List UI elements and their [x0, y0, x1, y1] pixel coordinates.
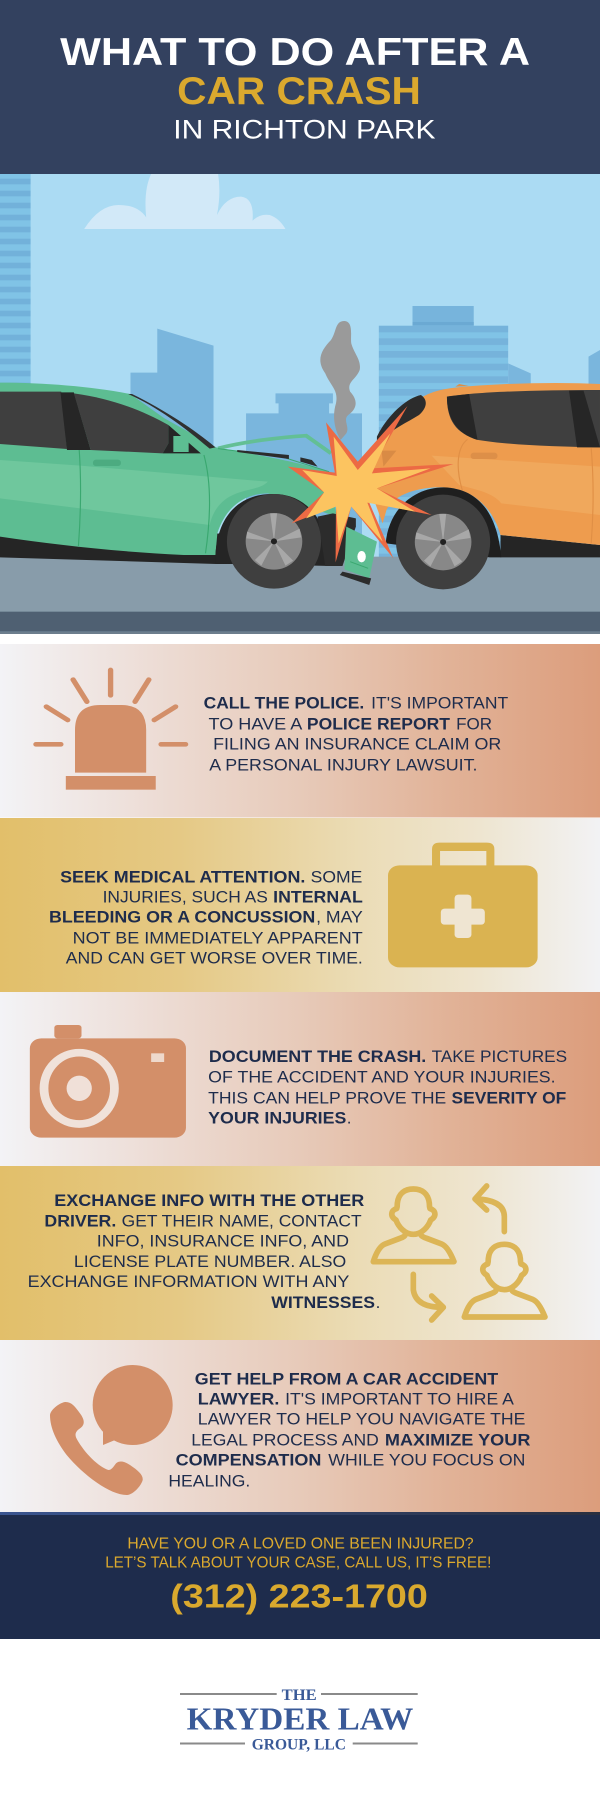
text: exchange info: GET THEIR NAME, CONTACT: [122, 1211, 362, 1230]
text: call the police: POLICE REPORT: [307, 714, 451, 733]
subtitle: IN RICHTON PARK: [173, 115, 436, 145]
text: document the crash: TAKE PICTURES: [432, 1047, 567, 1066]
text: get help: MAXIMIZE YOUR: [385, 1430, 530, 1449]
text: exchange info: EXCHANGE INFORMATION WITH ANY: [28, 1272, 349, 1291]
phone number: (312) 223-1700: [170, 1577, 428, 1614]
text: get help: HEALING.: [168, 1471, 250, 1490]
text: get help: [168, 1369, 530, 1490]
green car wheel: [227, 494, 321, 589]
text: get help: IT'S IMPORTANT TO HIRE A: [285, 1389, 515, 1408]
logo: the kryder law group: THE: [282, 1687, 317, 1704]
text: seek medical attention: INJURIES, SUCH AS: [103, 887, 268, 906]
call to action text: [105, 1535, 491, 1571]
text: get help: LEGAL PROCESS AND: [191, 1430, 379, 1449]
text: call the police: FILING AN INSURANCE CLAIM OR: [213, 734, 501, 753]
left tower: [0, 174, 31, 387]
text: seek medical attention: SOME: [311, 867, 362, 886]
text: document the crash: SEVERITY OF: [452, 1088, 566, 1107]
orange car: [362, 383, 600, 557]
smoke: [320, 321, 360, 440]
text: exchange info: LICENSE PLATE NUMBER. ALSO: [74, 1252, 346, 1271]
text: seek medical attention: NOT BE IMMEDIATELY APPARENT: [73, 928, 363, 947]
icon: first aid kit: [388, 843, 538, 967]
green car: [0, 383, 377, 585]
text: get help: WHILE YOU FOCUS ON: [328, 1450, 525, 1469]
panel: get help from a lawyer: [0, 1340, 600, 1512]
skyline: [130, 306, 600, 559]
text: call the police: FOR: [456, 714, 492, 733]
text: seek medical attention: SEEK MEDICAL ATTENTION.: [60, 867, 305, 886]
icon: siren: [36, 670, 186, 790]
title line: car crash: CAR CRASH: [177, 70, 421, 113]
text: exchange info: EXCHANGE INFO WITH THE OTHER: [54, 1191, 364, 1210]
title line: what to do after a: WHAT TO DO AFTER A: [60, 31, 530, 74]
call to action text: LET’S TALK ABOUT YOUR CASE, CALL US, IT’S FREE!: [105, 1554, 491, 1571]
text: call the police: A PERSONAL INJURY LAWSUIT.: [209, 755, 478, 774]
icon: phone with speech bubble: [50, 1365, 173, 1495]
text: get help: LAWYER.: [198, 1389, 279, 1408]
crash illustration: [0, 174, 600, 634]
panel: seek medical attention: [0, 818, 600, 992]
explosion: [288, 406, 453, 562]
text: get help: COMPENSATION: [176, 1450, 321, 1469]
text: document the crash: [208, 1047, 567, 1127]
text: seek medical attention: , MAY: [316, 908, 363, 927]
text: call the police: IT'S IMPORTANT: [371, 693, 508, 712]
cloud: [84, 174, 285, 229]
icon: camera: [30, 1025, 186, 1138]
call to action text: HAVE YOU OR A LOVED ONE BEEN INJURED?: [127, 1535, 474, 1552]
road: [0, 557, 600, 634]
text: exchange info: INFO, INSURANCE INFO, AND: [97, 1231, 349, 1250]
text: exchange info: [28, 1191, 380, 1312]
text: call the police: TO HAVE A: [208, 714, 303, 733]
text: exchange info: .: [376, 1293, 380, 1312]
logo: the kryder law group: [180, 1687, 418, 1753]
text: call the police: CALL THE POLICE.: [204, 693, 364, 712]
logo: the kryder law group: KRYDER LAW: [187, 1700, 413, 1736]
text: document the crash: OF THE ACCIDENT AND YOUR INJURIES.: [208, 1067, 556, 1086]
text: call the police: [204, 693, 508, 774]
text: seek medical attention: [49, 867, 363, 967]
text: document the crash: THIS CAN HELP PROVE THE: [208, 1088, 446, 1107]
panel: exchange info: [0, 1166, 600, 1340]
text: exchange info: WITNESSES: [271, 1293, 375, 1312]
text: get help: GET HELP FROM A CAR ACCIDENT: [195, 1369, 499, 1388]
text: document the crash: .: [347, 1108, 351, 1127]
call to action panel: [0, 1512, 600, 1639]
text: exchange info: DRIVER.: [44, 1211, 116, 1230]
panel: document the crash: [0, 992, 600, 1166]
text: seek medical attention: BLEEDING OR A CONCUSSION: [49, 908, 315, 927]
text: seek medical attention: INTERNAL: [273, 887, 363, 906]
text: seek medical attention: AND CAN GET WORSE OVER TIME.: [66, 948, 363, 967]
panel: call the police: [0, 644, 600, 818]
orange car wheel: [396, 495, 490, 589]
text: document the crash: YOUR INJURIES: [208, 1108, 346, 1127]
text: document the crash: DOCUMENT THE CRASH.: [209, 1047, 426, 1066]
logo: the kryder law group: GROUP, LLC: [252, 1736, 346, 1753]
text: get help: LAWYER TO HELP YOU NAVIGATE THE: [198, 1409, 525, 1428]
icon: two people exchanging: [373, 1186, 545, 1320]
header panel: [0, 0, 600, 174]
